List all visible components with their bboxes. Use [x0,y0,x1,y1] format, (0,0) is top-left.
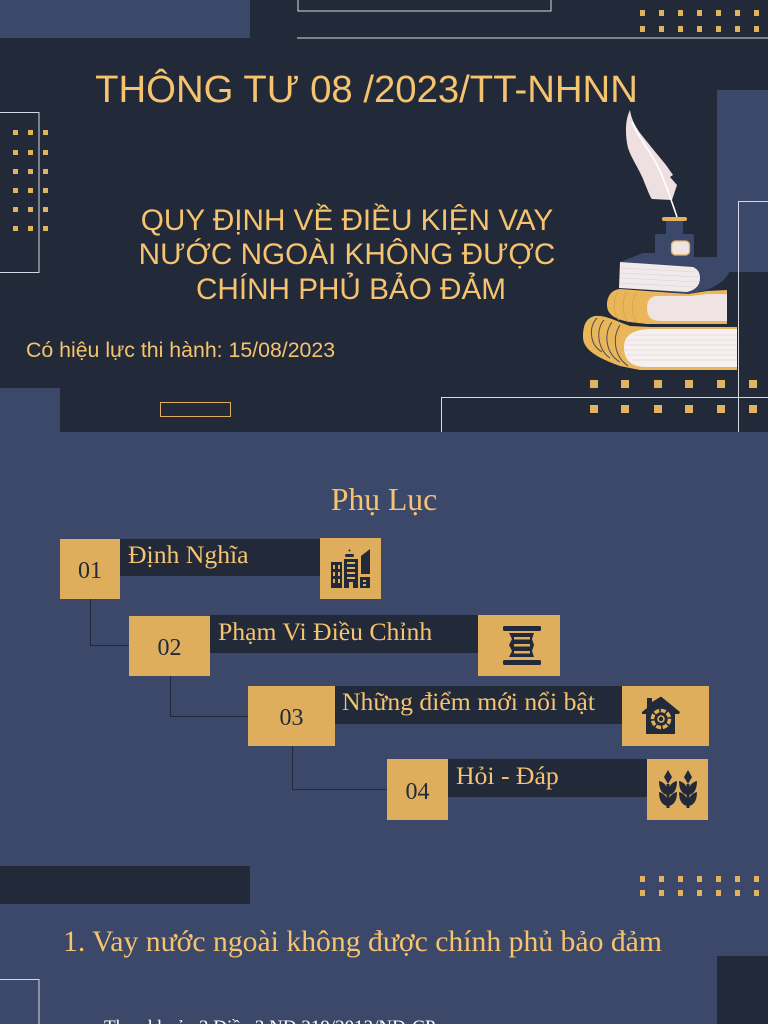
subtitle [139,203,555,306]
title: THÔNG TƯ 08 /2023/TT-NHNN [95,67,638,111]
item 03: Những điểm mới nổi bật [342,687,595,716]
item 01: Định Nghĩa [128,540,249,569]
item 04: 04 [406,779,430,805]
icon: scroll [503,626,541,665]
connectors [90,599,387,790]
item 04: Hỏi - Đáp [456,761,559,790]
effective date: Có hiệu lực thi hành: 15/08/2023 [26,338,335,362]
icon: house with gear [642,696,680,734]
subtitle: CHÍNH PHỦ BẢO ĐẢM [196,272,506,306]
item 01 [60,538,381,599]
subtitle: QUY ĐỊNH VỀ ĐIỀU KIỆN VAY [141,203,553,237]
item 03 [248,686,709,746]
panel: table of contents [60,482,709,820]
item 03: 03 [280,705,304,731]
item 02: 02 [158,635,182,661]
section heading: 1. Vay nước ngoài không được chính phủ bảo đảm [63,926,662,958]
item 02: Phạm Vi Điều Chỉnh [218,617,432,646]
item 02 [129,615,560,676]
subtitle: NƯỚC NGOÀI KHÔNG ĐƯỢC [139,237,555,271]
icon: wheat [659,770,697,808]
item 01: 01 [78,558,102,584]
item 04 [387,759,708,820]
icon: city buildings [331,549,370,588]
panel: section 1 [0,866,768,1024]
heading: Phụ Lục: Phụ Lục [331,482,437,517]
icon: feather, ink bottle and books [583,110,737,370]
panel: title slide [0,0,768,432]
